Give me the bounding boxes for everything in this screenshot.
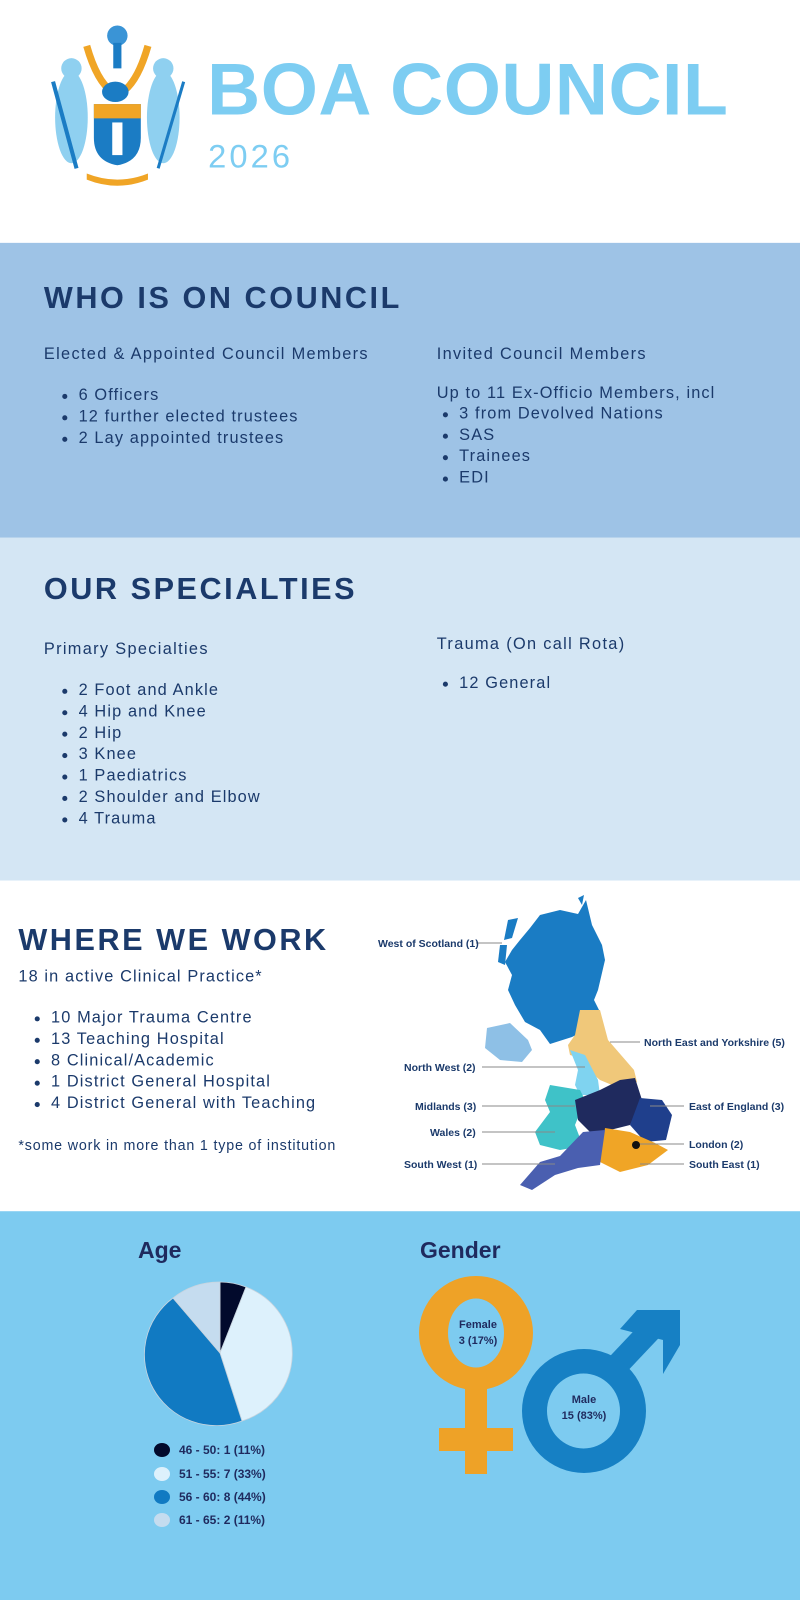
text: clinical practice: *some work in more than 1 type of institution: [18, 1137, 336, 1153]
panel: demographics: [138, 1237, 680, 1527]
chart: UK map: Midlands (3): [415, 1101, 476, 1113]
text: invited members: 3 from Devolved Nations: [459, 405, 664, 422]
chart: age pie: [144, 1282, 292, 1426]
icon: male symbol: [522, 1310, 680, 1473]
icon: female symbol: [419, 1276, 533, 1474]
heading: OUR SPECIALTIES: [44, 572, 357, 606]
text: trauma rota: 12 General: [459, 674, 551, 692]
icon: female symbol: 3 (17%): [459, 1335, 498, 1347]
heading: age: Age: [138, 1237, 181, 1263]
text: clinical practice: 13 Teaching Hospital: [51, 1031, 225, 1048]
heading: WHO IS ON COUNCIL: [44, 282, 402, 315]
panel: demographics background: [0, 1211, 800, 1600]
text: trauma rota: Trauma (On call Rota): [437, 636, 625, 653]
text: clinical practice: 10 Major Trauma Centre: [51, 1009, 253, 1027]
text: elected members: [44, 346, 369, 447]
chart: UK map: [378, 895, 785, 1190]
panel: who is on council: [0, 243, 800, 538]
legend: age: 51 - 55: 7 (33%): [179, 1467, 266, 1481]
subtitle year: 2026: [208, 138, 293, 174]
text: trauma rota: [437, 636, 625, 692]
chart: UK map: North East and Yorkshire (5): [644, 1037, 785, 1049]
icon: female symbol: Female: [459, 1319, 497, 1331]
chart: UK map: South East (1): [689, 1159, 760, 1171]
chart: UK map: Wales (2): [430, 1127, 476, 1139]
text: primary specialties: 4 Hip and Knee: [79, 703, 207, 720]
text: invited members: Invited Council Members: [437, 346, 647, 363]
icon: male symbol: Male: [572, 1394, 596, 1406]
text: primary specialties: 2 Hip: [79, 724, 122, 742]
text: primary specialties: Primary Specialties: [44, 641, 209, 658]
text: primary specialties: 3 Knee: [79, 746, 137, 763]
title: BOA COUNCIL: [207, 49, 728, 131]
chart: UK map: East of England (3): [689, 1101, 784, 1113]
legend: age: 46 - 50: 1 (11%): [179, 1443, 265, 1457]
text: invited members: [437, 346, 715, 487]
text: clinical practice: [18, 968, 336, 1153]
chart: UK map: West of Scotland (1): [378, 938, 479, 950]
panel: where we work: [0, 881, 800, 1211]
text: clinical practice: 4 District General with Teaching: [51, 1095, 316, 1112]
icon: BOA crest logo: [51, 26, 186, 186]
heading: WHERE WE WORK: [18, 923, 329, 957]
text: primary specialties: 2 Shoulder and Elbow: [79, 789, 261, 806]
text: elected members: Elected & Appointed Council Members: [44, 346, 369, 363]
text: elected members: 6 Officers: [79, 387, 159, 404]
text: elected members: 12 further elected trustees: [79, 408, 299, 426]
text: invited members: Up to 11 Ex-Officio Members, incl: [437, 385, 715, 402]
text: invited members: Trainees: [459, 448, 531, 465]
header: [0, 0, 800, 243]
chart: UK map: South West (1): [404, 1159, 477, 1171]
text: primary specialties: 4 Trauma: [79, 810, 157, 828]
text: invited members: EDI: [459, 469, 490, 487]
legend: age: 56 - 60: 8 (44%): [179, 1490, 266, 1504]
text: clinical practice: 1 District General Hospital: [51, 1073, 271, 1091]
legend: age: [154, 1443, 266, 1527]
legend: age: 61 - 65: 2 (11%): [179, 1513, 265, 1527]
text: clinical practice: 8 Clinical/Academic: [51, 1052, 215, 1069]
text: elected members: 2 Lay appointed trustees: [79, 430, 284, 447]
chart: UK map: North West (2): [404, 1062, 476, 1074]
text: primary specialties: 1 Paediatrics: [79, 767, 188, 785]
chart: UK map: London (2): [689, 1139, 743, 1151]
text: clinical practice: 18 in active Clinical Practice*: [18, 968, 263, 986]
text: primary specialties: 2 Foot and Ankle: [79, 682, 219, 699]
panel: our specialties: [0, 538, 800, 881]
heading: gender: Gender: [420, 1237, 501, 1263]
icon: male symbol: 15 (83%): [562, 1410, 607, 1422]
text: primary specialties: [44, 641, 261, 828]
text: invited members: SAS: [459, 427, 495, 444]
